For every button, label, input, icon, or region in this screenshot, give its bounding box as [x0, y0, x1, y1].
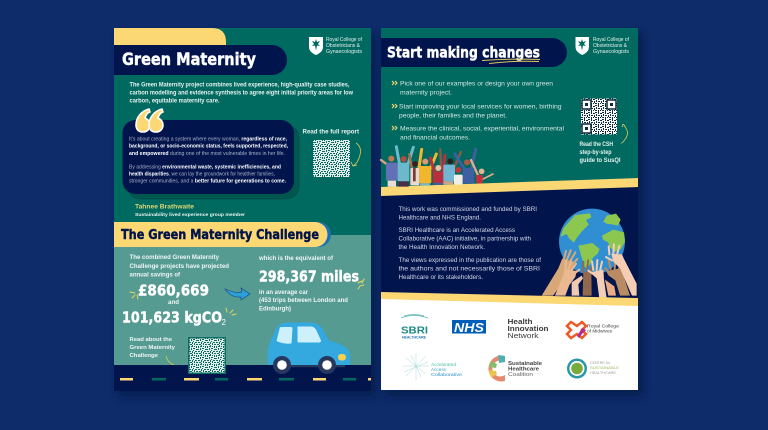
QR caption: Read the CSH	[580, 142, 613, 148]
navy footer-text block	[381, 182, 638, 302]
RCOG logo	[576, 37, 629, 55]
panel: Green Maternity poster	[114, 28, 371, 391]
quote text: It's about creating a system where every woman, regardless of race,	[129, 137, 288, 143]
quote text: By addressing environmental waste, systemic inefficiencies, and	[129, 164, 281, 170]
quote box shadow outline	[128, 125, 299, 199]
quote box	[122, 120, 294, 194]
panel: Start making changes poster	[381, 28, 638, 390]
quote text	[129, 137, 289, 184]
bullet list: maternity project.	[400, 90, 452, 96]
savings text: annual savings of	[130, 272, 181, 278]
logo: Accelerated Access Collaborative: Accelerated	[431, 362, 457, 367]
logo: NHS: NHS	[454, 320, 484, 335]
sparkles	[130, 292, 236, 315]
lower section background	[114, 235, 371, 366]
bullet list	[392, 80, 565, 142]
RCOG logo: Obstetricians &	[326, 43, 360, 49]
savings figure: £860,669	[138, 282, 209, 300]
funding text: The views expressed in the publication are those of	[398, 257, 541, 264]
sparkles: miles	[358, 279, 364, 289]
funding text: Healthcare and NHS England.	[398, 214, 481, 222]
navy title bar	[381, 38, 567, 67]
RCOG logo: Obstetricians &	[593, 43, 627, 49]
QR code: CSH guide	[581, 98, 617, 134]
arrow: savings to equivalent	[225, 288, 250, 300]
funding text: Collaborative (AAC) initiative, in partnership with	[398, 236, 531, 242]
quote text: background, or socio-economic status, feels supported, respected,	[129, 144, 289, 150]
logo: Health Innovation Network: Health	[508, 317, 533, 326]
QR caption	[580, 142, 621, 164]
logo: Sustainable Healthcare Coalition: Coalition	[508, 372, 533, 378]
intro text	[130, 83, 353, 105]
subscript 2: 2	[222, 318, 226, 327]
bullet list: people, their families and the planet.	[399, 112, 507, 120]
and: and	[168, 300, 179, 306]
logo: Royal College of Midwives	[567, 322, 619, 338]
QR prompt: Read about the	[130, 337, 173, 343]
intro text: The Green Maternity project combines lived experience, high-quality case studies,	[130, 83, 350, 89]
QR prompt: Green Maternity	[130, 345, 176, 351]
title: Start making changes	[387, 45, 540, 62]
arrow: to QR	[351, 143, 360, 166]
RCOG logo: Gynaecologists	[593, 49, 629, 55]
logo: Sustainable Healthcare Coalition: Sustainable	[508, 361, 542, 367]
upper yellow band	[381, 178, 638, 196]
bullet list: Start improving your local services for women, birthing	[399, 104, 562, 110]
logo: Royal College of Midwives: Royal College	[587, 324, 619, 330]
icon: car	[267, 322, 350, 374]
funding text	[398, 206, 541, 281]
logo: SBRI Healthcare: HEALTHCARE	[402, 336, 427, 340]
funding text: SBRI Healthcare is an Accelerated Access	[398, 227, 515, 234]
equivalent text: which is the equivalent of	[258, 256, 334, 262]
road markings	[120, 378, 371, 380]
intro text: carbon, equitable maternity care.	[130, 99, 220, 105]
report link label: Read the full report	[302, 129, 360, 136]
bullet list: and financial outcomes.	[400, 134, 470, 142]
QR caption: step-by-step	[580, 150, 612, 156]
arrow: to QR	[621, 124, 627, 143]
car text	[259, 290, 348, 312]
intro text: carbon modelling and evidence synthesis to agree eight initial priority areas for low	[130, 91, 353, 97]
title: Green Maternity	[122, 50, 256, 69]
quote text: stronger communities, and a better future for generations to come.	[129, 178, 287, 184]
navy title bar	[114, 45, 287, 75]
quote text: and empowered during one of the most vulnerable times in her life.	[129, 151, 285, 157]
quote attribution	[135, 203, 245, 218]
challenge header	[114, 222, 328, 247]
white logo area	[381, 295, 638, 390]
logo: Centre for Sustainable Healthcare: HEALTHCARE	[590, 370, 616, 375]
car text: in an average car	[259, 290, 309, 296]
yellow title tab	[114, 28, 226, 52]
funding text: This work was commissioned and funded by SBRI	[398, 206, 537, 213]
arrow: to challenge QR	[166, 356, 181, 368]
RCOG logo: Gynaecologists	[326, 49, 362, 55]
bullet list: Pick one of our examples or design your own green	[400, 80, 553, 88]
logo: Royal College of Midwives: of Midwives	[587, 328, 613, 334]
logo: Accelerated Access Collaborative: Collaborative	[431, 372, 463, 377]
car text: Edinburgh)	[259, 306, 291, 312]
savings text	[130, 255, 229, 278]
quote attribution: Sustainability lived experience group member	[135, 212, 245, 218]
logo: Sustainable Healthcare Coalition: Healthcare	[508, 366, 539, 372]
funding text: Healthcare or its stakeholders.	[398, 274, 483, 281]
challenge header shadow	[116, 222, 331, 247]
bullet list: Measure the clinical, social, experiential, environmental	[400, 126, 565, 132]
QR prompt: Challenge	[130, 353, 159, 359]
QR caption: guide to SusQI	[580, 158, 621, 164]
title underline	[482, 59, 540, 64]
car text: (453 trips between London and	[259, 298, 348, 304]
savings text: Challenge projects have projected	[130, 264, 229, 270]
logo: Sustainable Healthcare Coalition	[488, 355, 542, 382]
illustration: globe held by hands	[542, 209, 637, 298]
road	[114, 365, 371, 391]
QR prompt	[130, 337, 176, 359]
funding text: the authors and not necessarily those of SBRI	[398, 266, 540, 272]
logo: Accelerated Access Collaborative	[403, 353, 463, 380]
challenge title: The Green Maternity Challenge	[121, 227, 319, 243]
logo: SBRI Healthcare	[401, 314, 428, 340]
logo: Centre for Sustainable Healthcare	[567, 358, 619, 378]
logo: Centre for Sustainable Healthcare: SUSTAINABLE	[590, 365, 619, 370]
illustration: cheering people	[381, 147, 493, 187]
RCOG logo: Royal College of	[326, 37, 362, 43]
logo: Centre for Sustainable Healthcare: CENTRE for	[590, 360, 611, 365]
logo: Health Innovation Network: Network	[508, 331, 539, 340]
miles figure: 298,367 miles	[259, 268, 359, 286]
logo: SBRI Healthcare: SBRI	[401, 326, 428, 336]
savings text: The combined Green Maternity	[130, 255, 220, 261]
logo: Health Innovation Network	[508, 317, 549, 340]
QR code: challenge	[188, 337, 226, 374]
logo: Health Innovation Network: Innovation	[508, 324, 549, 333]
logo: Accelerated Access Collaborative: Access	[431, 367, 447, 372]
icon: quotation mark	[136, 109, 163, 132]
RCOG logo	[309, 37, 362, 55]
RCOG logo: Royal College of	[593, 37, 629, 43]
quote attribution: Tahnee Brathwaite	[135, 203, 194, 210]
lower yellow band	[381, 292, 638, 306]
funding text: the Health Innovation Network.	[398, 244, 485, 251]
QR code: full report	[313, 140, 350, 177]
carbon figure: 101,623 kgCO	[122, 308, 222, 326]
quote text: health disparities, we can lay the groundwork for healthier families,	[129, 172, 275, 178]
